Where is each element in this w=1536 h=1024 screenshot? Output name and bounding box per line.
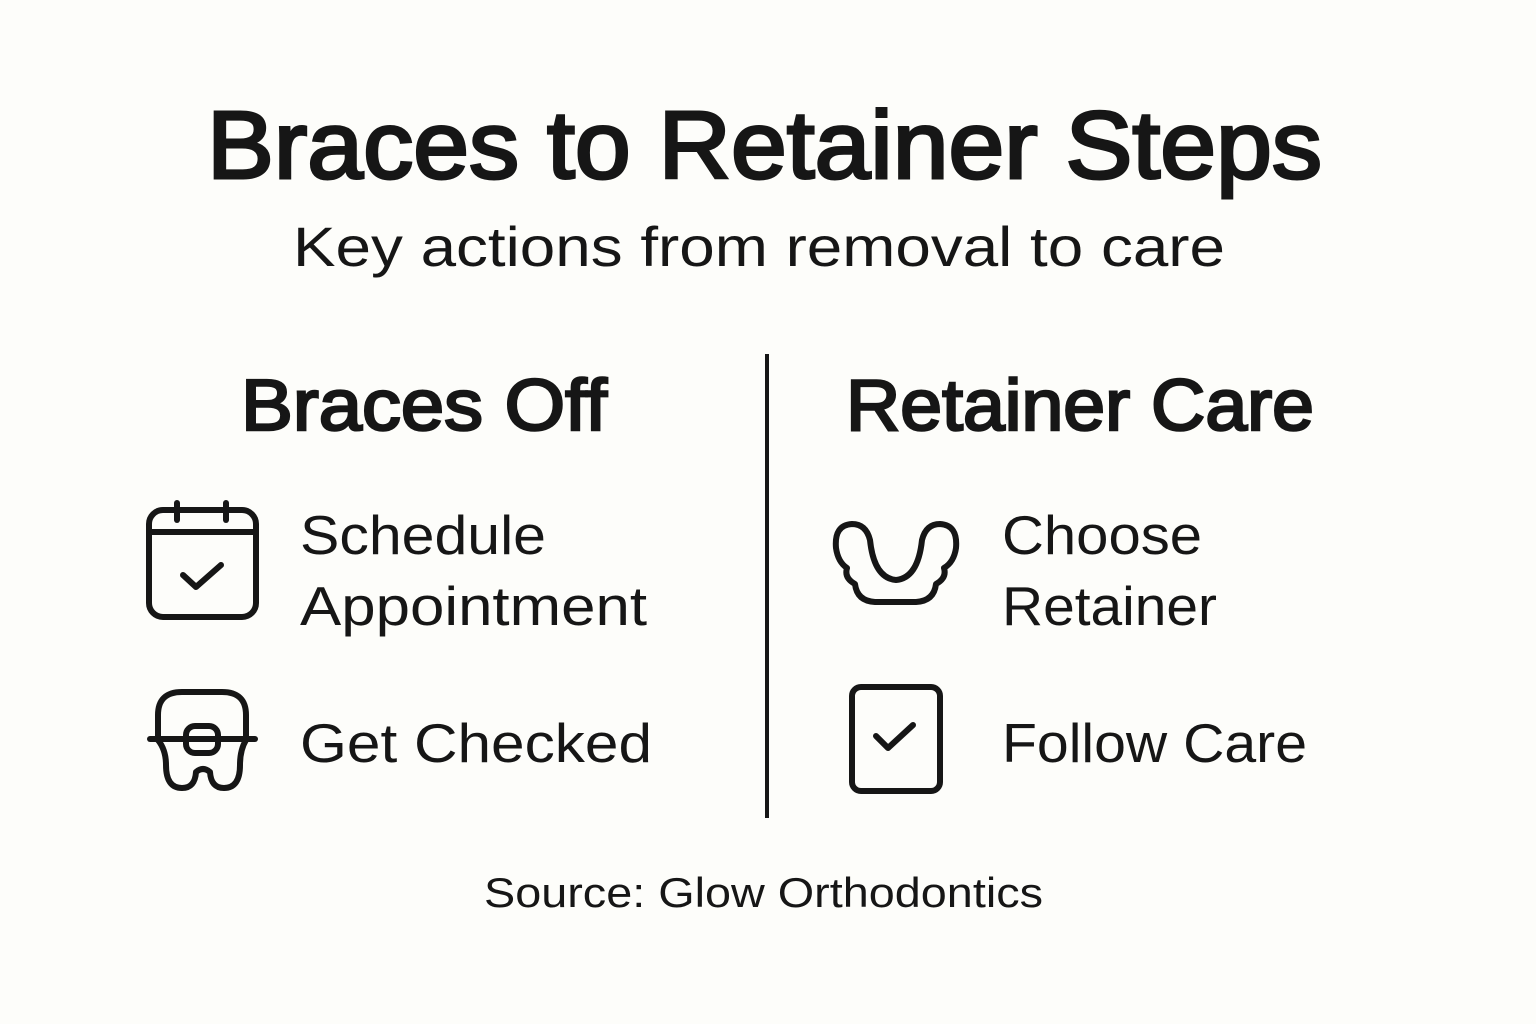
text: choose retainer	[1002, 504, 1217, 637]
heading: braces off: Braces Off	[241, 366, 608, 446]
icon: retainer	[836, 524, 956, 602]
divider	[765, 354, 769, 818]
subtitle: Key actions from removal to care	[293, 215, 1225, 278]
text: choose retainer: Retainer	[1002, 575, 1217, 637]
text: schedule appointment: Appointment	[300, 575, 647, 637]
text: follow care: Follow Care	[1002, 712, 1307, 774]
text: schedule appointment: Schedule	[300, 504, 546, 566]
icon: checklist	[852, 687, 940, 791]
icon: tooth with brace	[150, 692, 255, 788]
title: Braces to Retainer Steps	[207, 92, 1322, 199]
text: schedule appointment	[300, 504, 647, 637]
panel: retainer care	[836, 366, 1314, 791]
text: get checked: Get Checked	[300, 712, 652, 774]
panel: braces off	[149, 366, 652, 788]
icon: calendar	[149, 503, 256, 617]
text: choose retainer: Choose	[1002, 504, 1202, 566]
source: Source: Glow Orthodontics	[484, 869, 1043, 916]
heading: retainer care: Retainer Care	[846, 366, 1314, 446]
